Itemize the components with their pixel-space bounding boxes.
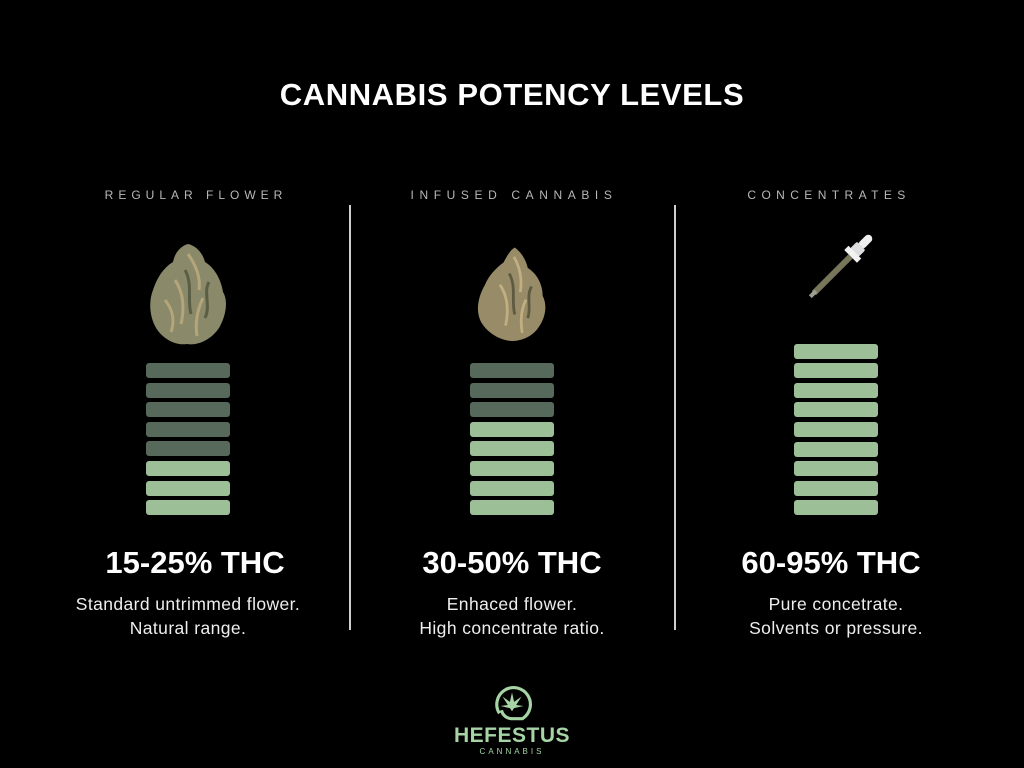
heading: 60-95%: 60-95% THC bbox=[741, 545, 921, 580]
label: concentrates: CONCENTRATES bbox=[747, 188, 911, 202]
icon: logo leaf circle bbox=[495, 686, 532, 720]
label: infused cannabis: INFUSED CANNABIS bbox=[411, 188, 617, 202]
text: regular flower desc bbox=[76, 594, 300, 638]
text: regular flower desc: Standard untrimmed flower. bbox=[76, 594, 300, 614]
bars: concentrates bbox=[794, 344, 878, 515]
text: infused desc bbox=[419, 594, 605, 638]
text: infused desc: Enhaced flower. bbox=[447, 594, 577, 614]
text: logo wordmark: HEFESTUS bbox=[454, 724, 570, 747]
divider 2 bbox=[674, 205, 676, 630]
bars: regular flower (5 of 8 dim, 3 lit) bbox=[146, 363, 230, 515]
icon: dropper bbox=[808, 234, 872, 298]
text: regular flower desc: Natural range. bbox=[130, 618, 246, 638]
bars: infused cannabis bbox=[470, 363, 554, 515]
heading: 30-50%: 30-50% THC bbox=[422, 545, 602, 580]
heading: 15-25%: 15-25% THC bbox=[105, 545, 285, 580]
title: CANNABIS POTENCY LEVELS bbox=[280, 77, 744, 112]
text: concentrates desc: Solvents or pressure. bbox=[749, 618, 923, 638]
icon: flower bud 1 bbox=[150, 244, 226, 344]
icon: flower bud 2 bbox=[478, 248, 546, 341]
logo bbox=[454, 686, 570, 756]
text: infused desc: High concentrate ratio. bbox=[419, 618, 605, 638]
label: regular flower: REGULAR FLOWER bbox=[105, 188, 287, 202]
divider 1 bbox=[349, 205, 351, 630]
text: concentrates desc: Pure concetrate. bbox=[769, 594, 903, 614]
logo: CANNABIS bbox=[480, 747, 544, 756]
text: concentrates desc bbox=[749, 594, 923, 638]
